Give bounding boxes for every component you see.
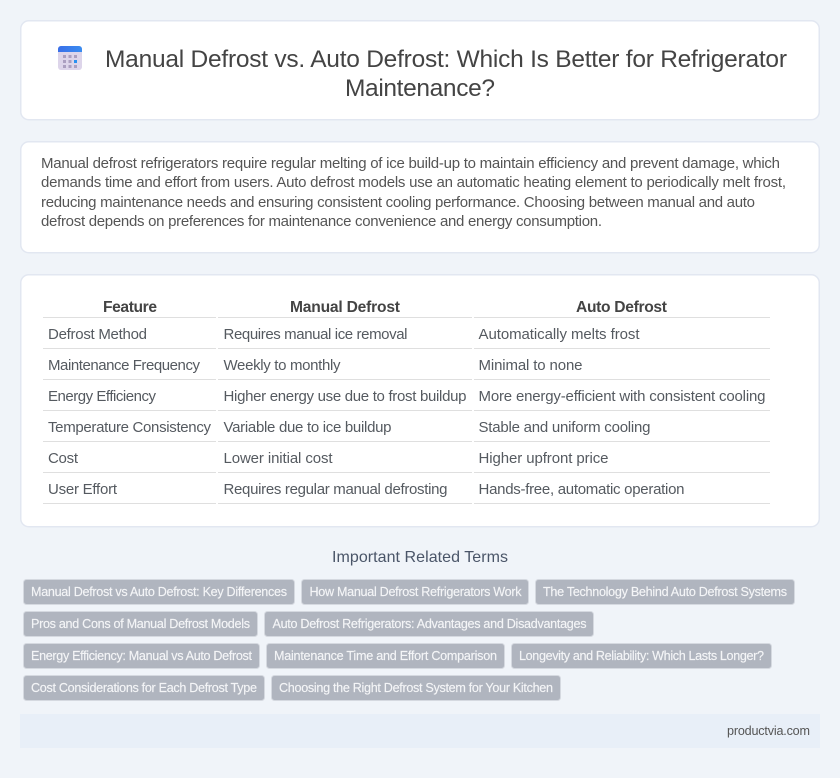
table header row <box>103 299 667 316</box>
tag: Manual Defrost vs Auto Defrost: Key Differences <box>31 585 287 599</box>
tag <box>266 644 504 668</box>
table header row: Auto Defrost <box>576 299 667 316</box>
panel: introduction text: defrost depends on preferences for maintenance convenience and energy consumption. <box>41 213 602 230</box>
table row: Defrost Method: Requires manual ice removal <box>224 326 408 343</box>
table header row: Feature <box>103 299 157 316</box>
table row: User Effort: User Effort <box>48 481 118 498</box>
tag <box>24 612 258 636</box>
panel: introduction text: Manual defrost refrigerators require regular melting of ice build-up to maintain efficiency and prevent damage, which <box>41 155 780 172</box>
table row: Maintenance Frequency: Weekly to monthly <box>224 357 341 374</box>
tag <box>24 676 264 700</box>
table row: User Effort: Hands-free, automatic operation <box>478 481 684 498</box>
tag <box>512 644 772 668</box>
icon: calendar <box>58 46 82 70</box>
title: Manual Defrost vs. Auto Defrost: Which Is Better for Refrigerator <box>105 46 787 73</box>
tag: Choosing the Right Defrost System for Your Kitchen <box>279 681 553 695</box>
tag <box>536 580 794 604</box>
title: Maintenance? <box>345 75 495 102</box>
tag: Longevity and Reliability: Which Lasts Longer? <box>519 649 764 663</box>
title <box>105 46 787 102</box>
table row: User Effort: Requires regular manual defrosting <box>224 481 448 498</box>
table row: Energy Efficiency: Higher energy use due to frost buildup <box>224 388 466 405</box>
table row: Defrost Method: Defrost Method <box>48 326 147 343</box>
panel: introduction text: reducing maintenance needs and ensuring consistent cooling performance. Choosing between manual and auto <box>41 194 755 211</box>
tag: How Manual Defrost Refrigerators Work <box>310 585 522 599</box>
table row: Maintenance Frequency: Maintenance Frequency <box>48 357 200 374</box>
table row: Temperature Consistency: Temperature Consistency <box>48 419 212 436</box>
table header row: Manual Defrost <box>290 299 400 316</box>
table row: Defrost Method <box>48 326 640 343</box>
tag <box>24 580 294 604</box>
table row: Cost <box>48 450 608 467</box>
table row: Energy Efficiency: Energy Efficiency <box>48 388 156 405</box>
table row: Maintenance Frequency <box>48 357 582 374</box>
table row: Temperature Consistency <box>48 419 650 436</box>
table row: Cost: Cost <box>48 450 79 467</box>
heading: related terms: Important Related Terms <box>332 549 508 566</box>
tag <box>24 644 260 668</box>
tag <box>264 612 594 636</box>
panel: introduction text <box>21 142 819 253</box>
tag: Maintenance Time and Effort Comparison <box>274 649 497 663</box>
tag: Cost Considerations for Each Defrost Type <box>31 681 257 695</box>
table row: Cost: Higher upfront price <box>478 450 608 467</box>
table row: Energy Efficiency <box>48 388 766 405</box>
table row: Defrost Method: Automatically melts frost <box>478 326 640 343</box>
tag <box>272 676 560 700</box>
table row: Temperature Consistency: Stable and uniform cooling <box>478 419 650 436</box>
footer bar <box>20 714 820 748</box>
tag: Auto Defrost Refrigerators: Advantages and Disadvantages <box>272 617 586 631</box>
related term tags <box>24 580 794 700</box>
table row: Temperature Consistency: Variable due to ice buildup <box>224 419 392 436</box>
tag: The Technology Behind Auto Defrost Systems <box>543 585 787 599</box>
table row: Maintenance Frequency: Minimal to none <box>478 357 582 374</box>
table row: User Effort <box>48 481 684 498</box>
footer bar: productvia.com <box>727 724 810 738</box>
tag <box>302 580 528 604</box>
tag: Pros and Cons of Manual Defrost Models <box>31 617 250 631</box>
table row: Cost: Lower initial cost <box>224 450 333 467</box>
tag: Energy Efficiency: Manual vs Auto Defrost <box>31 649 252 663</box>
panel: header <box>21 21 819 120</box>
panel: comparison table <box>21 275 819 527</box>
table row: Energy Efficiency: More energy-efficient with consistent cooling <box>478 388 766 405</box>
panel: introduction text: demands time and effort from users. Auto defrost models use an automatic heating element to periodically melt frost, <box>41 174 786 191</box>
